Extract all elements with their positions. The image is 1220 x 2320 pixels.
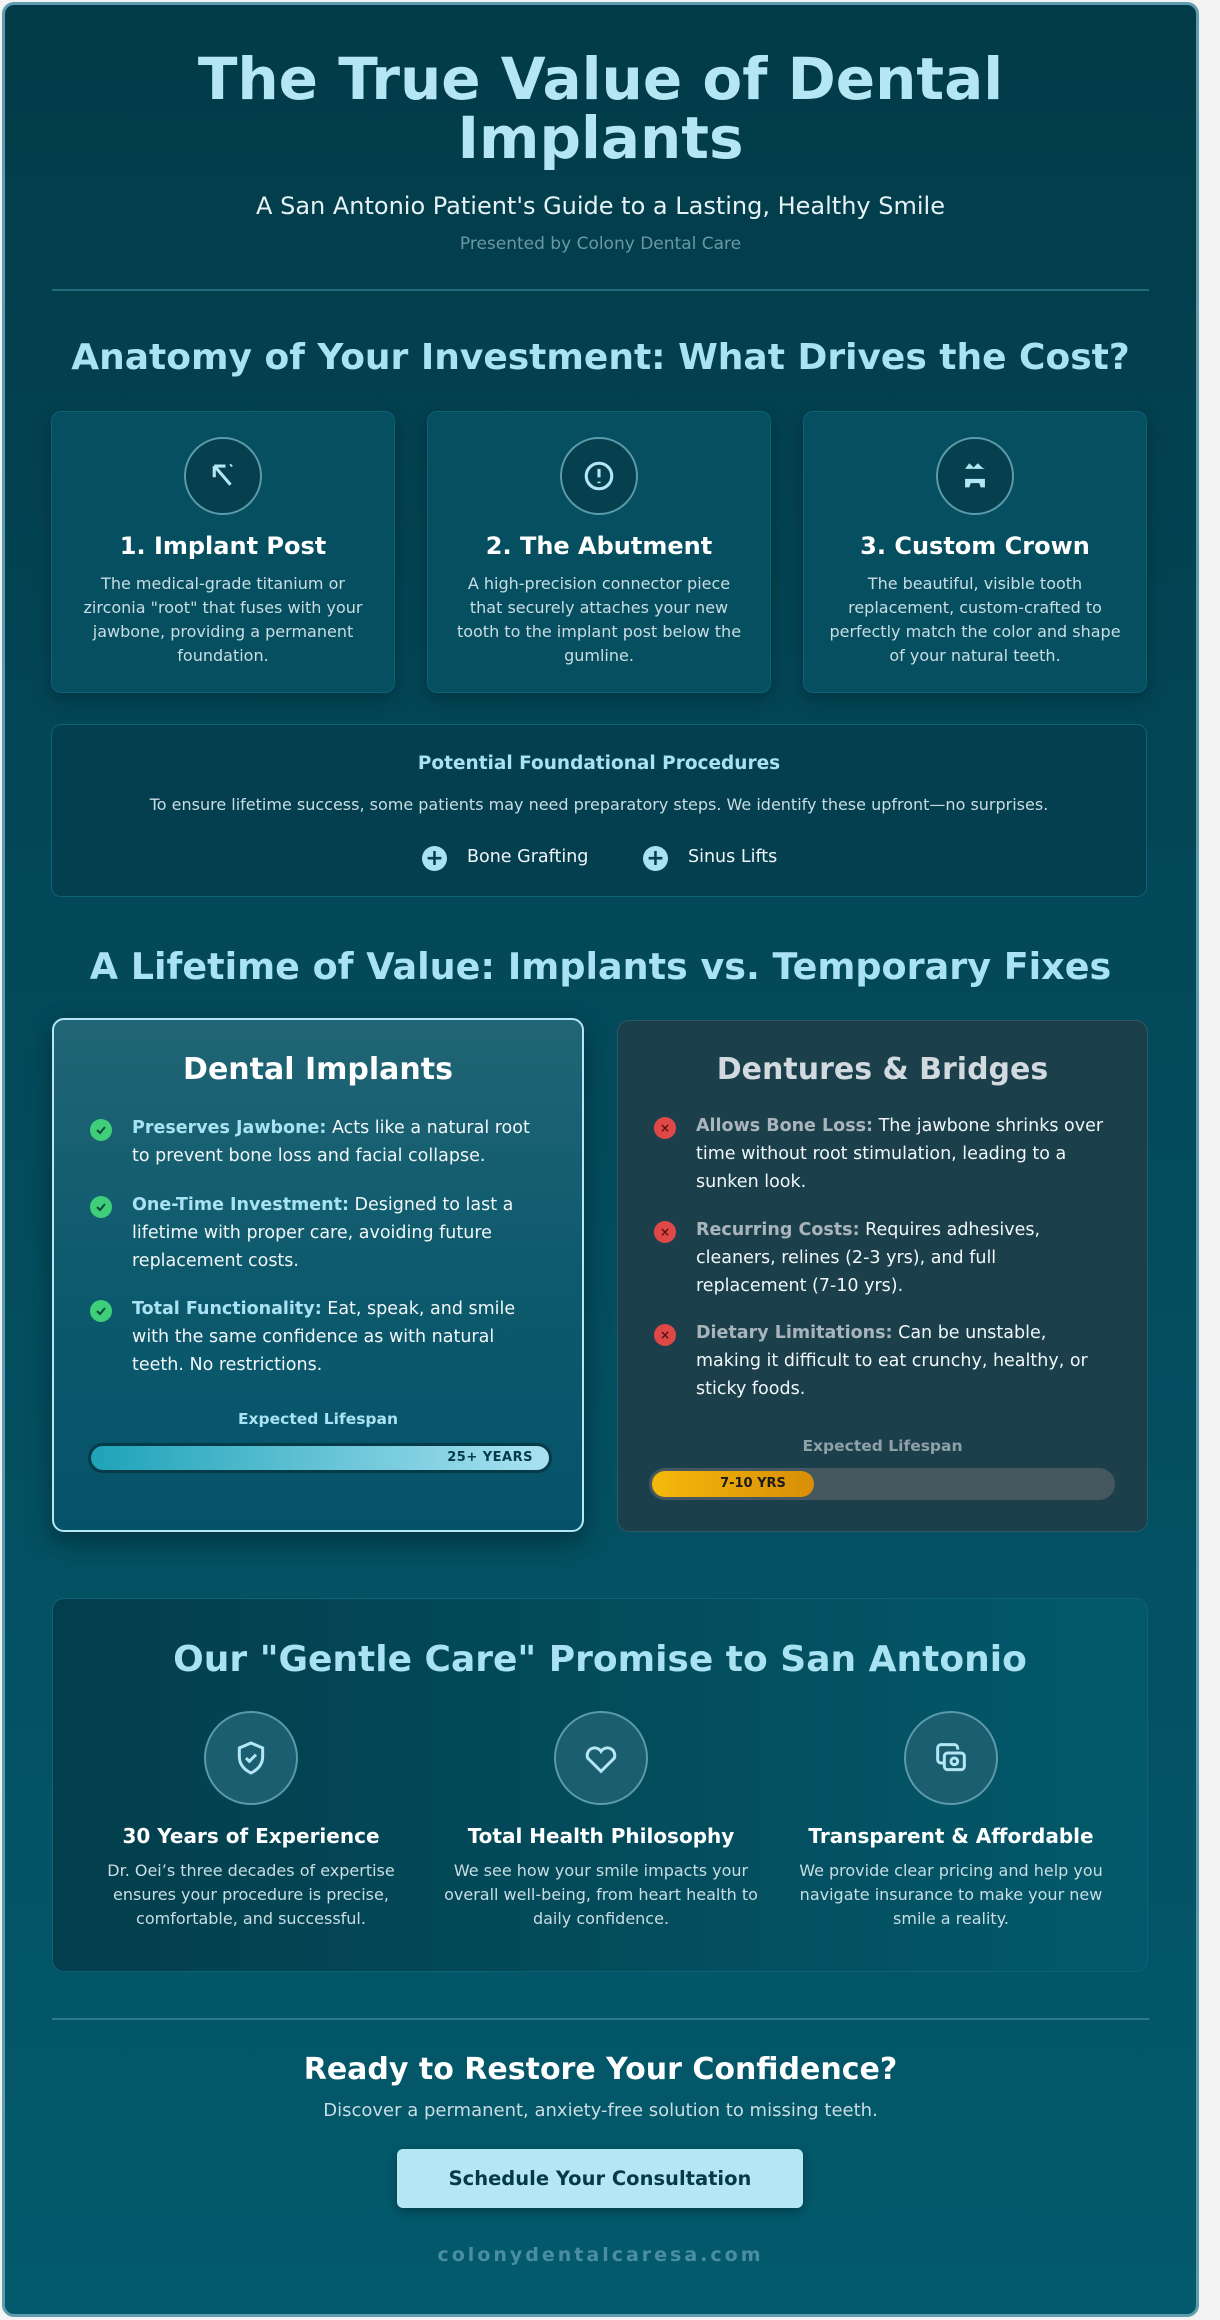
promise: affordable: We provide clear pricing and help you navigate insurance to make your new smile a reality.	[799, 1861, 1103, 1928]
heading: anatomy: Anatomy of Your Investment: What Drives the Cost?	[71, 337, 1130, 378]
panel: dentures: Dietary Limitations: Can be unstable, making it difficult to eat crunchy, healthy, or sticky foods.	[696, 1323, 1088, 1399]
panel: dentures: ×	[660, 1225, 670, 1239]
icon: implant post	[184, 437, 262, 515]
procedure items: +	[425, 846, 444, 871]
panel: foundational procedures: To ensure lifetime success, some patients may need preparatory steps. We identify these upfront—no surprises.	[150, 795, 1048, 814]
icon: crown	[936, 437, 1014, 515]
title: The True Value of Dental	[198, 45, 1003, 113]
card: implant post: 1. Implant Post	[120, 532, 326, 560]
card: crown: 3. Custom Crown	[860, 532, 1090, 560]
panel: dentures: Recurring Costs: Requires adhesives, cleaners, relines (2-3 yrs), and full replacement (7-10 yrs).	[696, 1220, 1040, 1296]
panel: dentures: Allows Bone Loss: The jawbone shrinks over time without root stimulation, leading to a sunken look.	[696, 1116, 1103, 1192]
CTA subtext: Discover a permanent, anxiety-free solution to missing teeth.	[323, 2100, 878, 2121]
card: crown	[803, 411, 1147, 693]
card: implant post: The medical-grade titanium or zirconia "root" that fuses with your jawbone, providing a permanent foundation.	[84, 574, 362, 665]
procedure items: Bone Grafting	[467, 847, 588, 867]
presenter line: Presented by Colony Dental Care	[460, 234, 741, 254]
promise: affordable	[799, 1711, 1103, 1928]
card: abutment	[427, 411, 771, 693]
subtitle: A San Antonio Patient's Guide to a Lasting, Healthy Smile	[256, 192, 945, 220]
title: Implants	[457, 104, 744, 172]
promise: experience: Dr. Oei’s three decades of expertise ensures your procedure is precise, comfortable, and successful.	[107, 1861, 395, 1928]
heading: comparison: A Lifetime of Value: Implants vs. Temporary Fixes	[90, 945, 1111, 988]
bar: dentures lifespan	[649, 1468, 1115, 1500]
procedure items	[422, 846, 777, 871]
panel: foundational procedures: Potential Foundational Procedures	[418, 753, 780, 774]
title	[198, 45, 1003, 172]
icon: abutment	[560, 437, 638, 515]
CTA heading: Ready to Restore Your Confidence?	[304, 2052, 897, 2087]
promise: health: Total Health Philosophy	[468, 1824, 734, 1848]
card: crown: The beautiful, visible tooth replacement, custom-crafted to perfectly match the color and shape of your natural teeth.	[829, 574, 1121, 665]
procedure items: +	[646, 846, 665, 871]
promise: health: We see how your smile impacts your overall well-being, from heart health to daily confidence.	[444, 1861, 758, 1928]
button: schedule	[397, 2149, 803, 2208]
panel: dental implants: Expected Lifespan	[238, 1410, 398, 1428]
panel: gentle care promise: Our "Gentle Care" Promise to San Antonio	[173, 1639, 1027, 1680]
bar: implants lifespan	[88, 1443, 552, 1473]
panel: dentures: Expected Lifespan	[802, 1437, 963, 1455]
button: schedule: Schedule Your Consultation	[449, 2167, 751, 2190]
panel: dental implants: Preserves Jawbone: Acts like a natural root to prevent bone loss and facial collapse.	[132, 1118, 530, 1166]
bar: dentures lifespan: 7-10 YRS	[720, 1476, 786, 1491]
panel: dental implants	[52, 1018, 584, 1532]
panel: dentures	[617, 1020, 1148, 1532]
bar: implants lifespan: 25+ YEARS	[447, 1450, 533, 1465]
panel: dental implants: One-Time Investment: Designed to last a lifetime with proper care, avoiding future replacement costs.	[132, 1195, 513, 1271]
promise: experience	[107, 1711, 395, 1928]
procedure items: Sinus Lifts	[688, 847, 777, 867]
panel: foundational procedures	[51, 724, 1147, 897]
card: abutment: 2. The Abutment	[486, 532, 712, 560]
panel: dental implants: Dental Implants	[183, 1052, 453, 1087]
footer url: colonydentalcaresa.com	[437, 2244, 764, 2266]
card: implant post	[51, 411, 395, 693]
promise: experience: 30 Years of Experience	[122, 1824, 380, 1848]
panel: dentures: ×	[660, 1121, 670, 1135]
promise: affordable: Transparent & Affordable	[808, 1824, 1094, 1848]
panel: dental implants: Total Functionality: Eat, speak, and smile with the same confidence as with natural teeth. No restrictions.	[132, 1299, 515, 1375]
card: abutment: A high-precision connector piece that securely attaches your new tooth to the implant post below the gumline.	[457, 574, 741, 665]
promise: health	[444, 1711, 758, 1928]
panel: dentures: ×	[660, 1328, 670, 1342]
panel: dentures: Dentures & Bridges	[717, 1052, 1048, 1087]
panel: gentle care promise	[52, 1598, 1148, 1972]
